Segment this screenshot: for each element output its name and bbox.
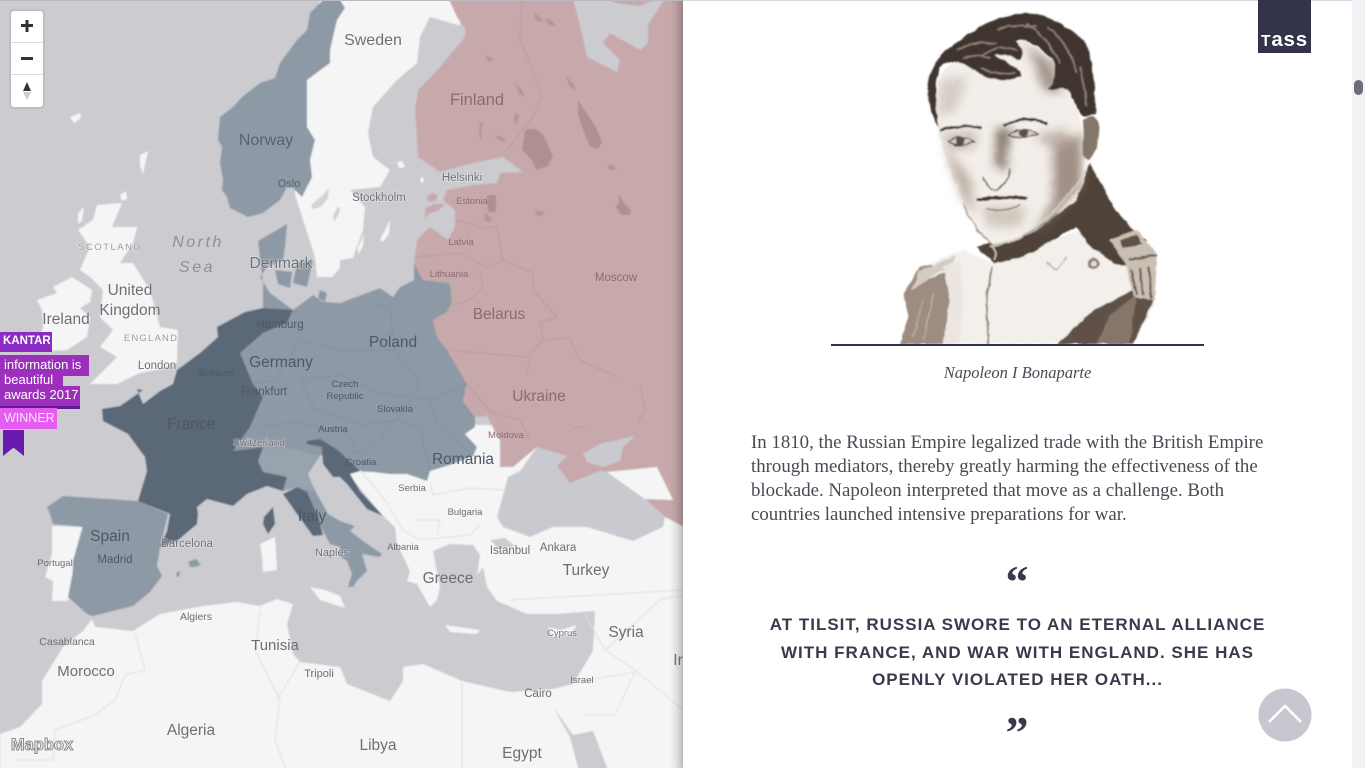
map: sea background <box>0 0 700 768</box>
logo: TASS <box>1258 0 1311 53</box>
badge: awards title <box>0 355 89 406</box>
map: Mediterranean details <box>490 538 610 768</box>
icon: opening quotation mark: “ <box>1006 556 1028 607</box>
map: Spain <box>47 496 201 616</box>
map labels: Africa and the Middle East: Cyprus <box>547 628 577 639</box>
caption: Napoleon I Bonaparte <box>944 363 1091 382</box>
map labels: Africa and the Middle East: Tripoli <box>304 668 334 680</box>
map labels: northern Europe: Ireland <box>42 311 90 328</box>
scrollbar thumb <box>1354 80 1363 95</box>
badge: winner ribbon <box>3 430 24 456</box>
map labels: central Europe: Moldova <box>488 430 525 441</box>
map: White Sea <box>572 0 667 72</box>
badge: awards title: beautiful <box>4 372 53 387</box>
map: Russian Empire <box>414 0 690 530</box>
map labels: central Europe: Belgium <box>199 368 233 379</box>
map labels: northern Europe: London <box>138 360 176 372</box>
map: Norway <box>218 0 345 217</box>
map labels: Africa and the Middle East: Israel <box>570 675 594 686</box>
text block: article paragraph: countries launched intensive preparations for war. <box>751 504 1127 525</box>
map: top edge <box>0 0 683 1</box>
map: France and French-held territory <box>102 308 383 547</box>
badge: ribbon shadow <box>0 404 80 409</box>
map labels: northern Europe <box>42 32 638 372</box>
map: panel edge shadow <box>670 0 683 768</box>
map labels: southern Europe: Madrid <box>97 554 133 566</box>
control: compass <box>11 74 43 107</box>
portrait: face <box>936 40 1085 245</box>
text block: article paragraph: through mediators, thereby greatly harming the effectiveness of the <box>751 456 1258 477</box>
map labels: northern Europe: Stockholm <box>352 192 406 204</box>
portrait: collar edge <box>990 170 1087 260</box>
map labels: southern Europe: Istanbul <box>490 545 530 557</box>
map labels: Africa and the Middle East: Syria <box>608 624 644 641</box>
map labels: Africa and the Middle East: Cairo <box>524 688 552 700</box>
map: Black Sea <box>497 447 665 541</box>
map labels: southern Europe: Spain <box>90 528 130 545</box>
text block: article paragraph <box>751 432 1263 525</box>
map: Switzerland and north Italy lighter area <box>258 447 320 492</box>
pull quote: AT TILSIT, RUSSIA SWORE TO AN ETERNAL ALLIANCE <box>770 615 1265 634</box>
map labels: Africa and the Middle East: Morocco <box>57 663 115 680</box>
map labels: northern Europe: Norway <box>239 132 293 149</box>
map: allied states (Germany, Poland, Austria, Romania, Italy) <box>233 263 477 587</box>
map labels: Africa and the Middle East: Ir <box>673 652 683 669</box>
portrait: hair <box>928 13 1097 128</box>
map: Denmark <box>258 224 327 312</box>
text block: article paragraph: In 1810, the Russian Empire legalized trade with the British Empire <box>751 432 1263 453</box>
map labels: southern Europe: Turkey <box>563 562 610 579</box>
icon: closing quotation mark: ” <box>1006 707 1028 758</box>
map labels: Africa and the Middle East: Casablanca <box>39 636 95 648</box>
top border line <box>683 0 1352 1</box>
map labels: northern Europe: Sweden <box>344 32 402 49</box>
map labels: northern Europe: Lithuania <box>430 269 469 280</box>
map: Illyrian Provinces <box>307 439 383 516</box>
map: Baltic Sea and Gulf of Bothnia <box>340 17 523 303</box>
map labels: northern Europe: Sea <box>179 259 215 276</box>
map: Corsica <box>263 507 275 534</box>
map labels: southern Europe: Bulgaria <box>448 507 483 518</box>
map: Baltic islands in pink <box>425 193 445 219</box>
map: base geography <box>0 0 700 768</box>
portrait: ear <box>1083 116 1099 160</box>
map labels: central Europe: Switzerland <box>233 438 285 449</box>
panel: article <box>683 0 1365 768</box>
map labels: northern Europe: Denmark <box>250 255 313 272</box>
portrait: collar <box>977 163 1147 267</box>
logo: Mapbox wordmark: Mapbox <box>11 736 74 754</box>
map labels: northern Europe: ENGLAND <box>124 333 178 344</box>
map labels: northern Europe: North <box>172 234 224 251</box>
map labels: central Europe: Czech <box>332 379 358 390</box>
map labels: southern Europe: Serbia <box>398 483 426 494</box>
map labels: central Europe: Romania <box>432 451 494 468</box>
map labels: northern Europe: Moscow <box>595 272 638 284</box>
button: scroll to top <box>1258 688 1312 742</box>
map labels: southern Europe: Ankara <box>540 542 577 554</box>
portrait: coat <box>900 230 1157 344</box>
map labels: northern Europe: Latvia <box>448 237 474 248</box>
map labels: central Europe: Slovakia <box>377 404 414 415</box>
map labels: central Europe: Belarus <box>473 306 526 323</box>
pull quote <box>770 615 1265 689</box>
map: Sea of Azov <box>583 436 635 467</box>
map labels: central Europe: Hamburg <box>256 319 304 331</box>
portrait: facial features <box>942 120 1057 245</box>
map labels: southern Europe: Albania <box>387 542 420 553</box>
map labels: central Europe: Germany <box>249 354 313 371</box>
map labels: central Europe: Croatia <box>346 457 377 468</box>
pull quote: OPENLY VIOLATED HER OATH... <box>872 670 1163 689</box>
portrait: epaulette <box>1087 230 1157 300</box>
map labels: northern Europe: Oslo <box>278 178 300 190</box>
control: zoom out <box>11 42 43 74</box>
map labels: central Europe: Austria <box>318 424 348 435</box>
map labels: northern Europe: Finland <box>450 91 504 109</box>
map labels: central Europe: Ukraine <box>512 388 566 405</box>
map controls: zoom and compass <box>10 10 44 108</box>
map: Russian lakes <box>479 12 631 222</box>
map labels: southern Europe <box>37 483 610 587</box>
map labels: northern Europe: Kingdom <box>99 302 161 319</box>
map labels: southern Europe: Barcelona <box>161 538 213 550</box>
portrait: hair highlights <box>957 23 1087 107</box>
map labels: central Europe: Poland <box>369 334 417 351</box>
map labels: central Europe: Republic <box>327 391 364 402</box>
map: Gotland and Oland <box>358 220 390 255</box>
map labels: northern Europe: United <box>108 282 152 299</box>
map labels: Africa and the Middle East: Egypt <box>502 745 543 762</box>
map: small islands <box>70 113 424 224</box>
panel: map of Europe <box>0 0 683 768</box>
badge: Kantar tag <box>0 332 52 352</box>
badge: awards title: information is <box>4 357 81 372</box>
badge: winner tag: WINNER <box>4 411 55 425</box>
illustration: portrait of Napoleon <box>899 12 1158 344</box>
map labels: southern Europe: Italy <box>298 508 326 525</box>
map labels: Africa and the Middle East: Tunisia <box>251 637 300 654</box>
map labels: northern Europe: SCOTLAND <box>78 242 142 253</box>
control: zoom in <box>21 20 33 32</box>
map labels: northern Europe: Helsinki <box>442 172 482 184</box>
logo: TASS: Tass <box>1261 28 1308 51</box>
map labels: southern Europe: Naples <box>315 547 350 559</box>
pull quote: WITH FRANCE, AND WAR WITH ENGLAND. SHE HAS <box>781 643 1254 662</box>
map labels: Africa and the Middle East: Libya <box>359 737 397 754</box>
map labels: Africa and the Middle East: Algiers <box>180 611 212 623</box>
map labels: central Europe: France <box>167 416 215 433</box>
map labels: southern Europe: Greece <box>423 570 473 587</box>
badge: winner tag <box>0 408 57 429</box>
badge: Kantar tag: KANTAR <box>3 335 51 347</box>
divider under portrait <box>831 344 1204 346</box>
text block: article paragraph: blockade. Napoleon interpreted that move as a challenge. Both <box>751 480 1224 501</box>
map labels: Africa and the Middle East <box>39 611 683 762</box>
map: border lines <box>15 0 683 768</box>
scrollbar <box>1352 0 1365 768</box>
map labels: southern Europe: Portugal <box>37 558 73 569</box>
badge: awards title: awards 2017 <box>4 387 78 402</box>
portrait: face shading <box>938 43 1082 233</box>
map labels: central Europe: Frankfurt <box>241 386 288 398</box>
map labels: central Europe <box>167 306 566 468</box>
map: neutral land <box>0 0 690 768</box>
map: Swedish lakes <box>311 188 340 222</box>
map labels: Africa and the Middle East: Algeria <box>167 722 216 739</box>
map labels: northern Europe: Estonia <box>456 196 489 207</box>
map: central Italy <box>283 487 323 536</box>
badge: Information is Beautiful Awards 2017 winner <box>0 332 89 456</box>
